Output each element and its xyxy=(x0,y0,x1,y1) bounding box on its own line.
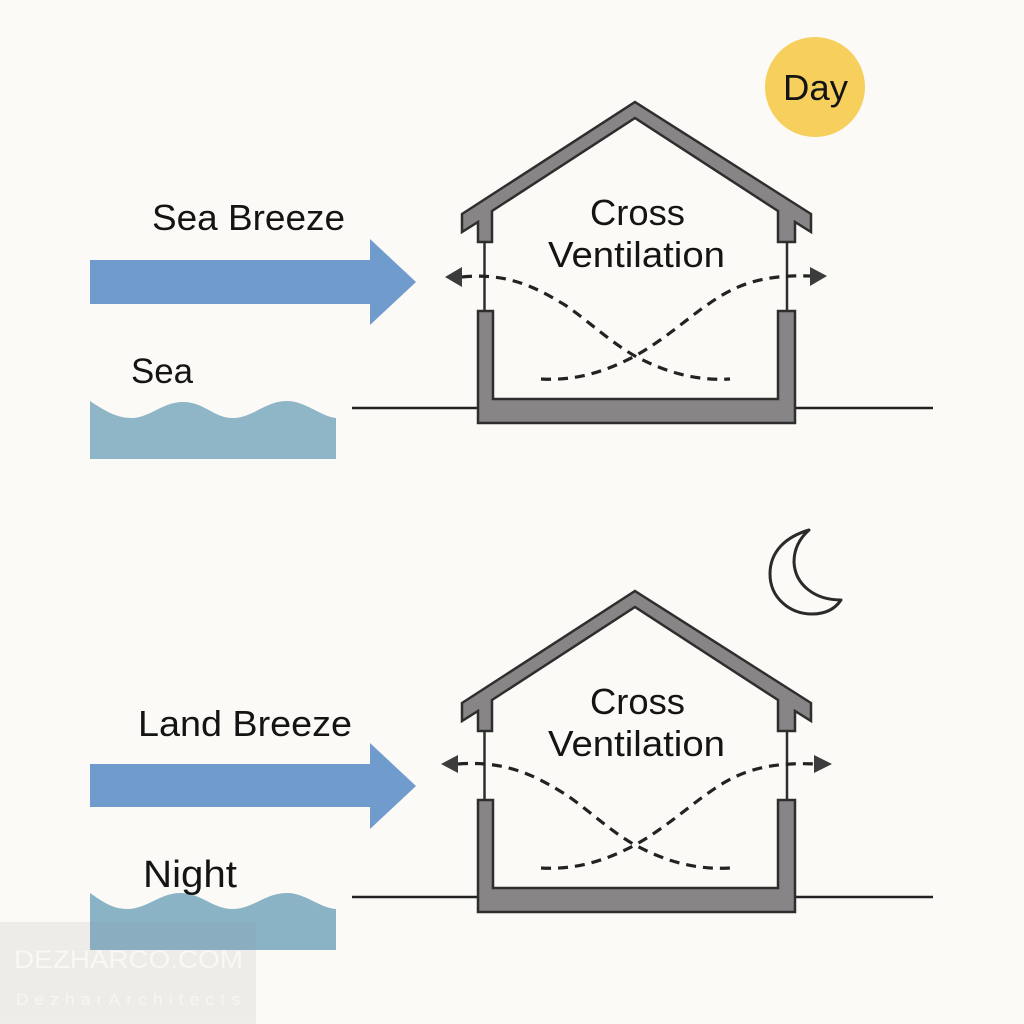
panel: day scene xyxy=(90,37,933,459)
icon: sun with Day label: Day xyxy=(783,67,848,108)
house section xyxy=(462,591,811,912)
label: Cross Ventilation: Cross xyxy=(590,681,685,722)
house section xyxy=(462,102,811,423)
ground line xyxy=(352,407,933,409)
label: Cross Ventilation: Ventilation xyxy=(548,234,725,275)
window posts xyxy=(484,731,787,800)
icon: sun with Day label xyxy=(765,37,865,137)
walls and floor xyxy=(478,311,795,423)
icon: crescent moon xyxy=(770,530,841,614)
airflow dashed curves xyxy=(462,276,810,379)
label: Cross Ventilation: Ventilation xyxy=(548,723,725,764)
label: Cross Ventilation xyxy=(548,192,725,275)
heading: Land Breeze: Land Breeze xyxy=(138,703,352,744)
roof xyxy=(462,102,811,242)
sea waves xyxy=(90,893,336,950)
watermark: DEZHARCO.COM xyxy=(14,946,243,974)
airflow dashed curves xyxy=(458,763,815,868)
arrow: land breeze xyxy=(90,743,416,829)
heading: Sea Breeze: Sea Breeze xyxy=(152,197,345,238)
window posts xyxy=(484,242,787,311)
label: Night: Night xyxy=(143,854,237,896)
roof xyxy=(462,591,811,731)
label: Cross Ventilation xyxy=(548,681,725,764)
airflow arrowheads xyxy=(445,267,827,287)
sea waves xyxy=(90,401,336,459)
ground line xyxy=(352,896,933,898)
airflow arrowheads xyxy=(441,755,832,773)
watermark: DezharArchitects xyxy=(16,990,240,1009)
walls and floor xyxy=(478,800,795,912)
label: Cross Ventilation: Cross xyxy=(590,192,685,233)
arrow: sea breeze xyxy=(90,239,416,325)
label: Sea: Sea xyxy=(131,352,194,391)
panel: night scene xyxy=(90,530,933,950)
watermark xyxy=(0,922,256,1024)
